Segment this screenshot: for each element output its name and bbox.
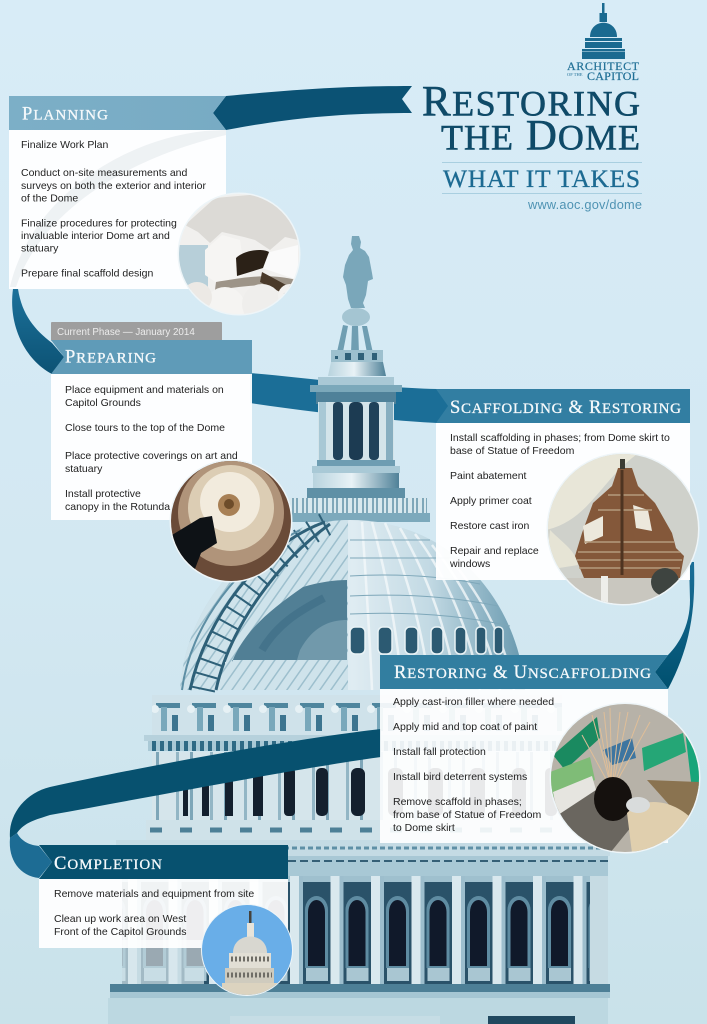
scaffolding tasks: windows [449,558,490,570]
restoring heading: RESTORING & UNSCAFFOLDING [394,663,651,683]
restoring tasks: to Dome skirt [393,822,455,834]
planning heading: PLANNING [22,104,108,124]
preparing tasks: canopy in the Rotunda [65,501,170,513]
photo: rotunda interior [165,460,292,582]
planning ribbon ghost [10,130,226,287]
ribbon: scaffolding to restoring [655,562,694,689]
scaffolding tasks: base of Statue of Freedom [450,445,575,457]
dome windows [350,627,503,654]
completion heading: COMPLETION [54,854,162,874]
restoring tasks: Apply cast-iron filler where needed [393,696,554,708]
dome shell [180,520,525,690]
preparing heading: PREPARING [65,348,156,368]
logo wordmark: ARCHITECT [567,59,640,73]
ribbon: title to planning [213,86,412,130]
preparing header [51,340,252,374]
current phase tag [51,322,222,341]
planning tasks: Finalize procedures for protecting [21,218,177,230]
title [422,78,640,193]
scaffolding body [436,423,690,580]
planning tasks: Finalize Work Plan [21,139,108,151]
restoring tasks: from base of Statue of Freedom [393,809,541,821]
scaffolding heading: SCAFFOLDING & RESTORING [450,398,681,418]
scaffolding header [436,389,690,423]
scaffolding tasks: Paint abatement [450,470,527,482]
lantern [289,325,430,522]
panel: planning [9,96,226,289]
restoring header [380,655,668,689]
logo dome icon [582,3,625,59]
subtitle rule bottom [442,193,642,194]
preparing tasks: Capitol Grounds [65,397,141,409]
planning tasks: statuary [21,242,59,254]
ribbon: completion arrow [10,833,52,878]
planning header [9,96,226,130]
planning body [9,130,226,289]
preparing body [51,374,252,520]
restoring body [380,689,668,843]
ribbon: preparing to scaffolding [250,373,449,423]
completion tasks: Front of the Capitol Grounds [54,926,186,938]
restoring tasks: Apply mid and top coat of paint [393,721,537,733]
scaffolding tasks: Repair and replace [450,545,539,557]
logo: architect of the capitol [567,3,640,83]
completion header [39,845,288,879]
scaffolding tasks: Restore cast iron [450,520,530,532]
panel: completion [39,845,288,948]
completion body [39,879,288,948]
logo wordmark: OF THE [567,72,583,77]
planning tasks: of the Dome [21,192,78,204]
title line one: RESTORING [422,78,640,126]
title line two: THE DOME [441,112,640,160]
attic and entablature [116,820,610,876]
peristyle cornice [144,735,572,751]
subtitle: WHAT IT TAKES [443,164,640,193]
logo wordmark: CAPITOL [587,69,639,83]
illustration: capitol dome [108,236,610,1024]
statue of freedom [342,236,373,326]
photo: cast iron damage [178,192,302,327]
preparing tasks: Place protective coverings on art and [65,450,238,462]
planning tasks: Prepare final scaffold design [21,268,153,280]
preparing tasks: Close tours to the top of the Dome [65,422,225,434]
building base [108,984,610,1024]
dome rings [350,540,510,626]
preparing tasks: statuary [65,463,103,475]
restoring tasks: Install fall protection [393,746,486,758]
subtitle rule top [442,162,642,163]
photo: dome under scaffolding [546,452,700,608]
scaffolding tasks: Apply primer coat [450,495,532,507]
ribbon: restoring to completion [10,729,381,838]
completion tasks: Remove materials and equipment from site [54,888,254,900]
planning tasks: invaluable interior Dome art and [21,230,170,242]
photo: cast iron grinding [550,702,705,854]
lower colonnade [122,876,608,984]
completion tasks: Clean up work area on West [54,913,186,925]
planning tasks: Conduct on-site measurements and [21,167,187,179]
current phase tag: Current Phase — January 2014 [57,327,195,338]
restoring tasks: Remove scaffold in phases; [393,796,522,808]
website url: www.aoc.gov/dome [527,197,642,212]
restoring tasks: Install bird deterrent systems [393,771,527,783]
planning tasks: surveys on both the exterior and interior [21,180,207,192]
panel: preparing [51,340,252,520]
scaffolding tasks: Install scaffolding in phases; from Dome skirt to [450,432,670,444]
peristyle colonnade [152,752,562,820]
preparing tasks: Install protective [65,488,141,500]
panel: scaffolding and restoring [436,389,690,580]
cutaway dome truss [180,520,348,690]
panel: restoring and unscaffolding [380,655,668,843]
photo: restored capitol [200,904,294,998]
preparing tasks: Place equipment and materials on [65,384,224,396]
dome ribs [362,522,514,690]
peristyle brackets [152,695,562,735]
ribbon: planning to preparing [12,289,64,374]
